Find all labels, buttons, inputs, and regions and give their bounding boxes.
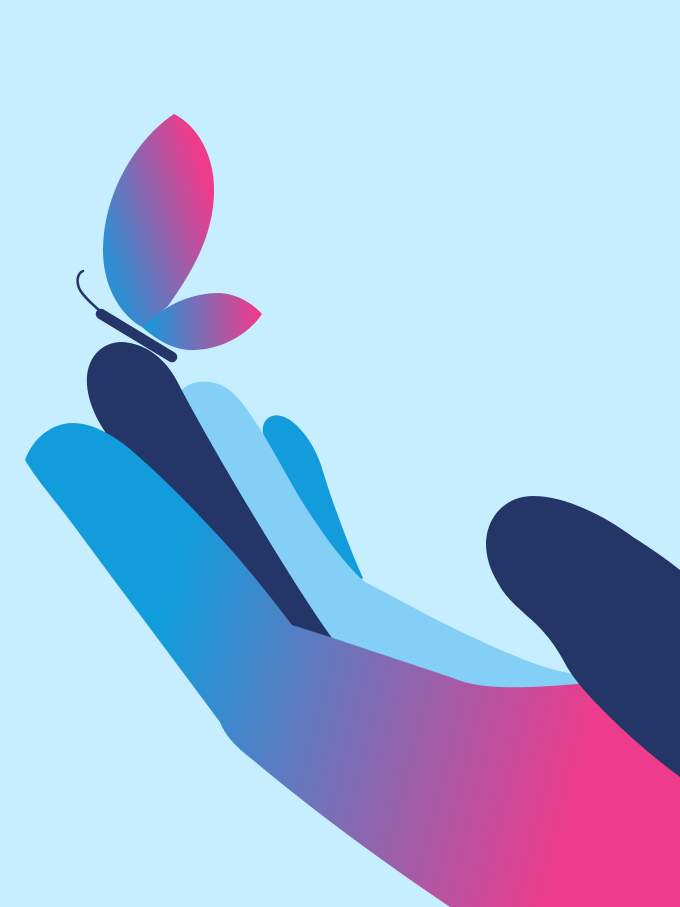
wing: upper: [103, 114, 214, 327]
butterfly: [78, 114, 262, 357]
finger: light blue finger and palm: [170, 382, 580, 700]
finger: far back finger: [263, 415, 363, 590]
antenna: [78, 271, 100, 311]
body: [101, 314, 172, 357]
wing: lower: [142, 293, 262, 350]
thumb: navy: [486, 496, 680, 777]
finger: navy index finger: [87, 342, 332, 640]
hand: gradient palm: [25, 423, 680, 907]
